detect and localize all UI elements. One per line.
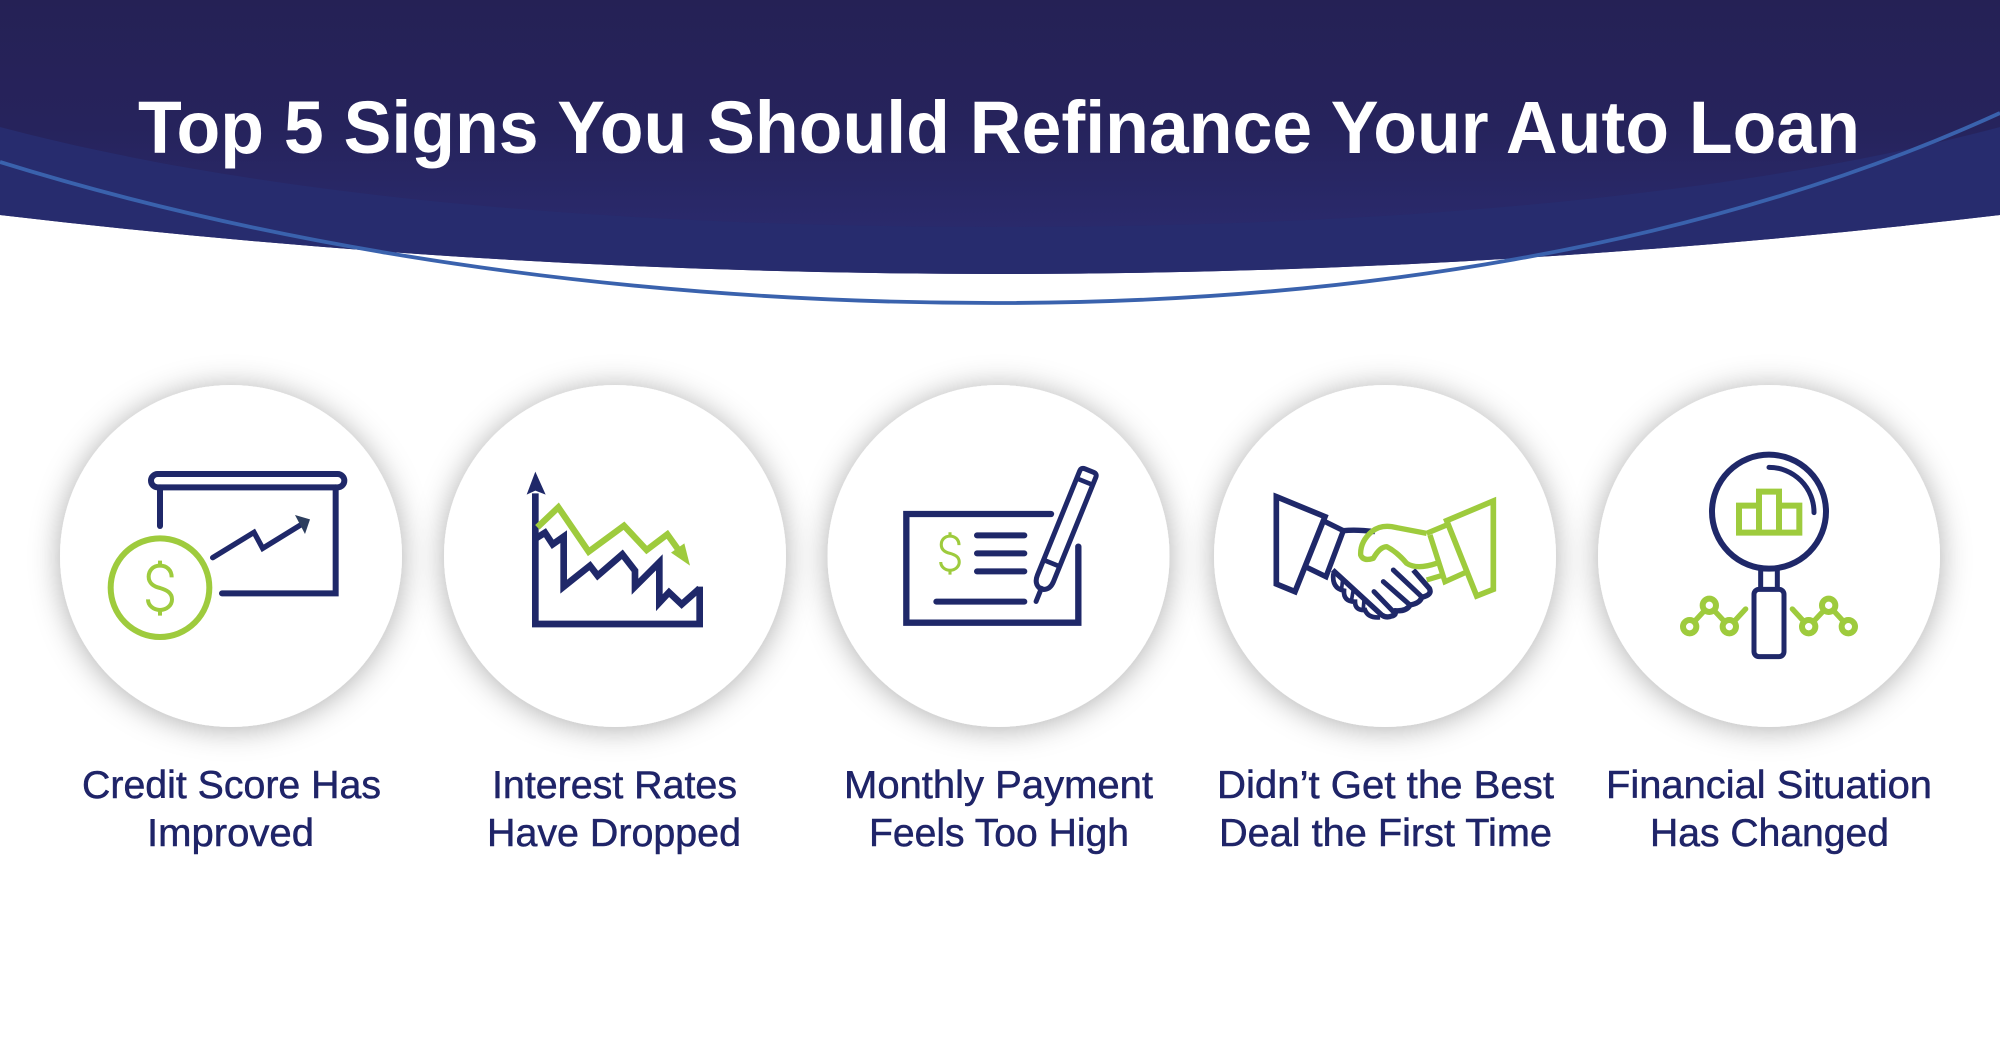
header banner — [0, 0, 2000, 303]
label: Feels Too High — [869, 812, 1129, 855]
label: Improved — [147, 812, 314, 855]
panel: interest rates — [444, 385, 786, 855]
label — [844, 764, 1153, 855]
label: Interest Rates — [492, 764, 737, 807]
title: Top 5 Signs You Should Refinance Your Auto Loan — [138, 86, 1860, 169]
label — [1217, 764, 1554, 855]
panel: credit score — [60, 385, 402, 855]
label: Deal the First Time — [1219, 812, 1552, 855]
label: Didn’t Get the Best — [1217, 764, 1554, 807]
header accent curve — [0, 113, 2000, 303]
circle badge — [828, 385, 1170, 727]
circle badge — [1598, 385, 1940, 727]
label — [1606, 764, 1932, 855]
circle badge — [444, 385, 786, 727]
icon: check and pen — [906, 467, 1097, 623]
label — [82, 764, 381, 855]
icon: presentation board with dollar coin — [111, 474, 344, 637]
panel: monthly payment — [828, 385, 1170, 855]
label — [487, 764, 741, 855]
icon: handshake — [1276, 497, 1493, 617]
label: Monthly Payment — [844, 764, 1153, 807]
panel: best deal — [1214, 385, 1556, 855]
label: Credit Score Has — [82, 764, 381, 807]
circle badge — [1214, 385, 1556, 727]
icon: magnifying glass with charts — [1683, 455, 1855, 657]
circle badge — [60, 385, 402, 727]
panel: financial situation — [1598, 385, 1940, 855]
icon: falling rate chart — [527, 472, 700, 624]
label: Financial Situation — [1606, 764, 1932, 807]
label: Has Changed — [1650, 812, 1889, 855]
label: Have Dropped — [487, 812, 741, 855]
